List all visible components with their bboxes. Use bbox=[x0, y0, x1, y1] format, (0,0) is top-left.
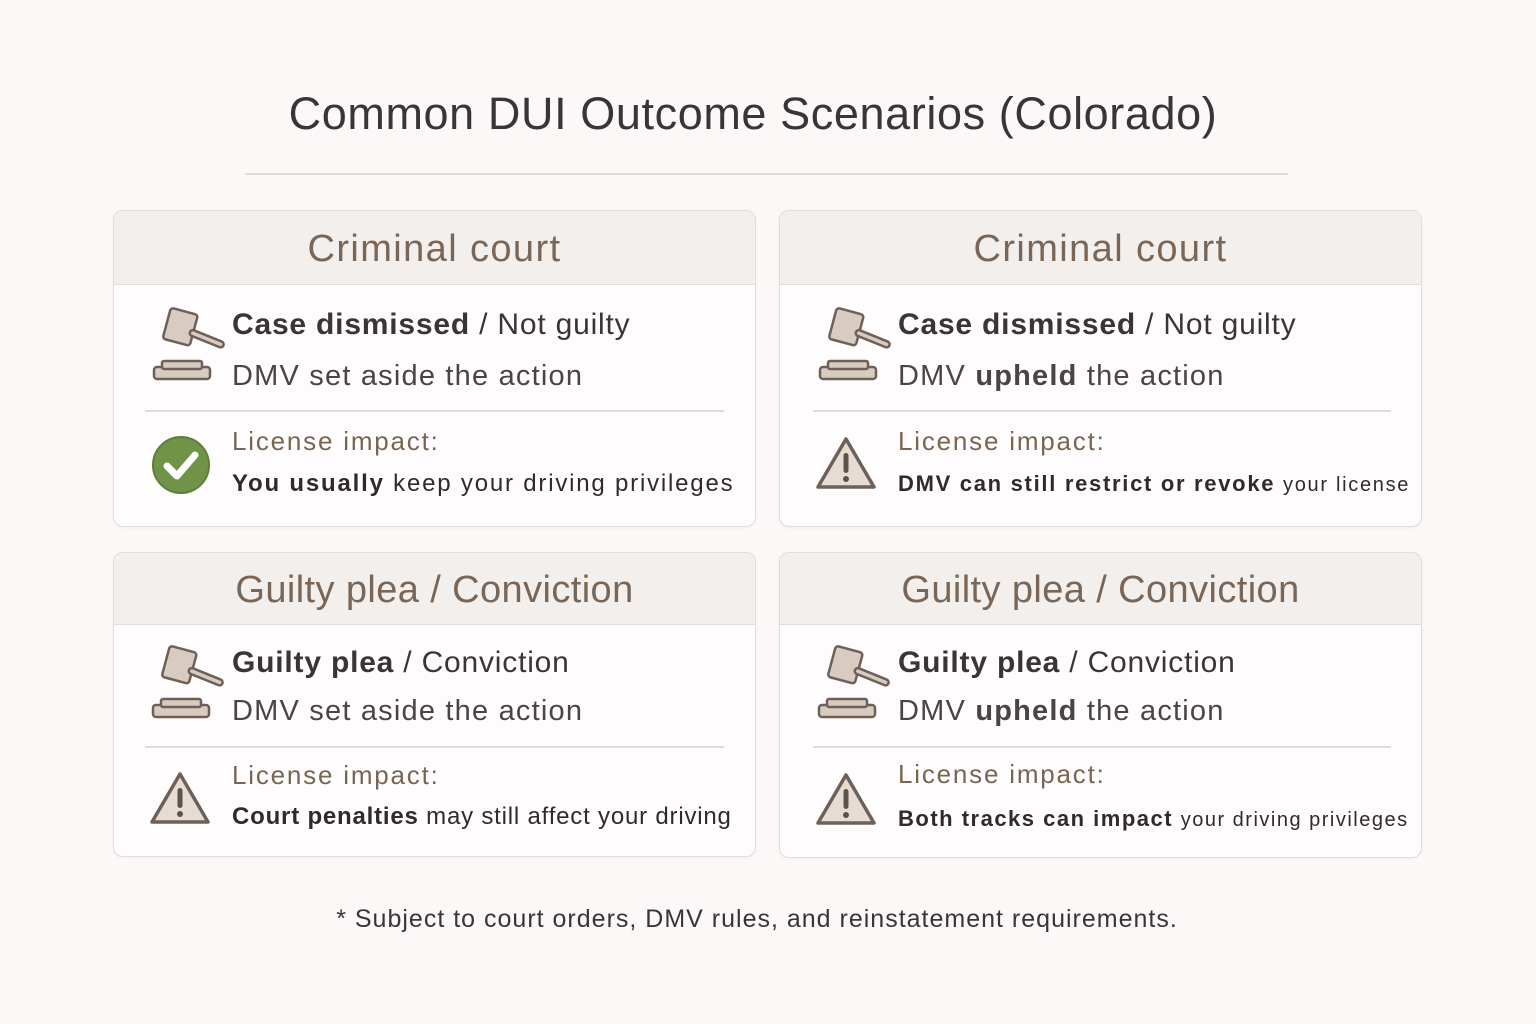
text: outcome: Case dismissed / Not guilty bbox=[232, 308, 630, 341]
text: dmv: DMV set aside the action bbox=[232, 695, 583, 727]
panel: top left bbox=[113, 210, 756, 527]
text: license impact: License impact: bbox=[232, 760, 440, 790]
heading: Criminal court bbox=[974, 228, 1227, 270]
icon: check bbox=[152, 436, 210, 494]
icon: warning bbox=[816, 773, 876, 825]
text: impact detail: Both tracks can impact your driving privileges bbox=[898, 806, 1409, 831]
icon: gavel bbox=[818, 645, 890, 718]
icon: warning bbox=[150, 772, 210, 824]
heading: Criminal court bbox=[308, 228, 561, 270]
heading bbox=[114, 553, 755, 625]
text: impact detail: DMV can still restrict or revoke your license bbox=[898, 471, 1410, 496]
text: outcome: Guilty plea / Conviction bbox=[898, 646, 1236, 679]
heading bbox=[780, 553, 1421, 625]
text: outcome: Case dismissed / Not guilty bbox=[898, 308, 1296, 341]
heading bbox=[114, 211, 755, 285]
heading: Guilty plea / Conviction bbox=[235, 569, 634, 611]
icon: gavel bbox=[152, 307, 225, 380]
text: outcome: Guilty plea / Conviction bbox=[232, 646, 570, 679]
text: license impact: License impact: bbox=[898, 426, 1106, 456]
text: impact detail: You usually keep your driving privileges bbox=[232, 470, 734, 497]
heading bbox=[780, 211, 1421, 285]
footnote: * Subject to court orders, DMV rules, and reinstatement requirements. bbox=[336, 905, 1178, 933]
panel: bottom right bbox=[779, 552, 1422, 858]
icon: gavel bbox=[818, 307, 891, 380]
icon: gavel bbox=[152, 645, 224, 718]
panel: bottom left bbox=[113, 552, 756, 857]
text: dmv: DMV set aside the action bbox=[232, 360, 583, 392]
text: dmv: DMV upheld the action bbox=[898, 695, 1225, 727]
icon: warning bbox=[816, 437, 876, 489]
text: dmv: DMV upheld the action bbox=[898, 360, 1225, 392]
panel: top right bbox=[779, 210, 1422, 527]
text: license impact: License impact: bbox=[232, 426, 440, 456]
title: Common DUI Outcome Scenarios (Colorado) bbox=[289, 88, 1217, 139]
heading: Guilty plea / Conviction bbox=[901, 569, 1300, 611]
text: impact detail: Court penalties may still affect your driving bbox=[232, 803, 732, 830]
text: license impact: License impact: bbox=[898, 759, 1106, 789]
